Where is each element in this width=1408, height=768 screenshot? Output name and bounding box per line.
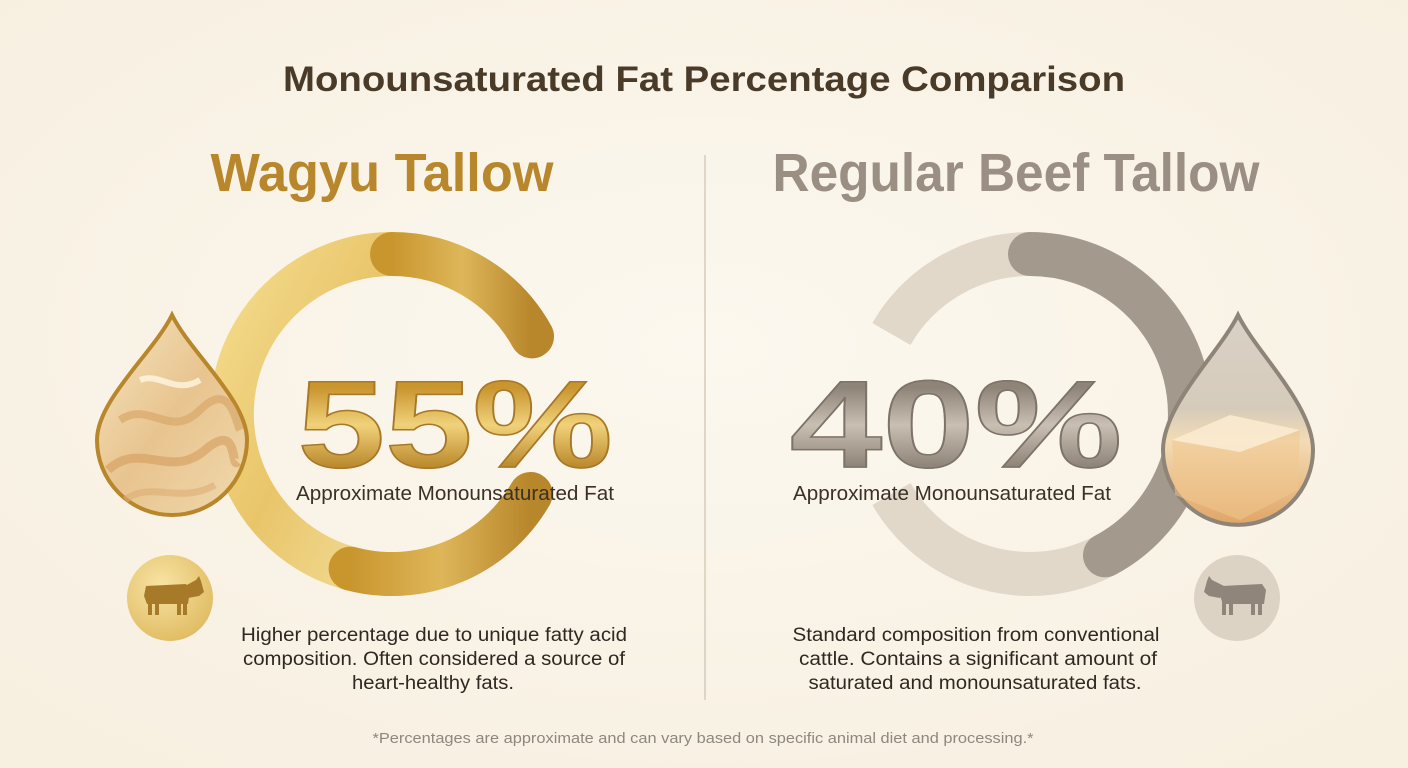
description: heart-healthy fats. xyxy=(352,673,514,694)
icon: cow badge xyxy=(1194,555,1280,641)
icon: tallow drop xyxy=(1163,315,1313,525)
heading: regular beef tallow: Regular Beef Tallow xyxy=(772,143,1260,203)
label: approximate: Approximate Monounsaturated Fat xyxy=(793,483,1111,505)
big number 55%: 55% xyxy=(298,356,613,494)
ring chart: 55% xyxy=(232,254,532,574)
description: Higher percentage due to unique fatty acid xyxy=(241,625,627,646)
panel: wagyu tallow xyxy=(97,143,627,694)
panel: regular beef tallow xyxy=(772,143,1313,694)
heading: wagyu tallow: Wagyu Tallow xyxy=(210,143,554,203)
footnote: *Percentages are approximate and can vary based on specific animal diet and processing.* xyxy=(372,730,1034,747)
big number 40%: 40% xyxy=(790,356,1122,494)
description: cattle. Contains a significant amount of xyxy=(799,649,1158,670)
ring chart: 40% xyxy=(891,254,1190,574)
description: saturated and monounsaturated fats. xyxy=(808,673,1142,694)
label: approximate: Approximate Monounsaturated Fat xyxy=(296,483,614,505)
icon: cow badge xyxy=(127,555,213,641)
description: composition. Often considered a source of xyxy=(243,649,626,670)
title: Monounsaturated Fat Percentage Comparison xyxy=(283,60,1125,99)
icon: marbled fat drop xyxy=(97,315,247,515)
description xyxy=(241,625,627,694)
description xyxy=(792,625,1160,694)
description: Standard composition from conventional xyxy=(792,625,1160,646)
